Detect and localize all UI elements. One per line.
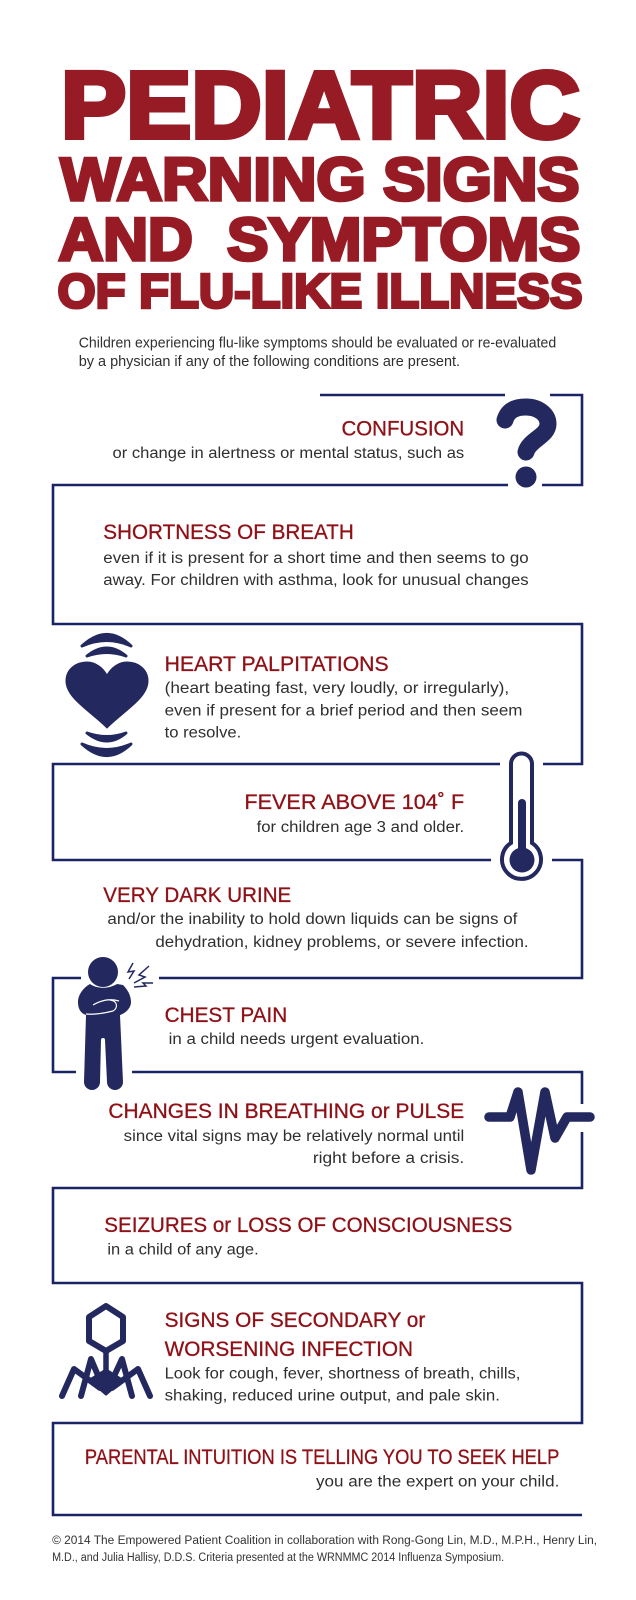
panel: changes in breathing or pulse: CHANGES IN BREATHING or PULSE	[108, 1099, 464, 1123]
panel: confusion	[112, 416, 464, 462]
panel: chest pain: CHEST PAIN	[165, 1003, 287, 1027]
panel: heart palpitations: even if present for a brief period and then seem	[165, 702, 522, 720]
panel: fever: for children age 3 and older.	[257, 819, 464, 836]
panel: seizures: SEIZURES or LOSS OF CONSCIOUSNESS	[104, 1213, 512, 1237]
panel: shortness of breath	[103, 520, 529, 589]
panel: confusion: or change in alertness or mental status, such as	[112, 445, 464, 462]
panel: parental intuition: you are the expert on your child.	[316, 1474, 559, 1490]
panel: changes in breathing or pulse	[108, 1099, 464, 1167]
icon: heart	[66, 634, 148, 756]
icon: person with chest pain	[76, 957, 159, 1090]
panel: secondary infection: WORSENING INFECTION	[165, 1337, 413, 1361]
title: PEDIATRIC	[61, 52, 580, 158]
intro text	[79, 336, 556, 370]
panel: secondary infection: SIGNS OF SECONDARY or	[165, 1308, 425, 1332]
panel: chest pain: in a child needs urgent evaluation.	[169, 1031, 424, 1048]
panel: shortness of breath: away. For children with asthma, look for unusual changes	[103, 572, 529, 589]
panel: parental intuition	[85, 1445, 559, 1490]
panel: fever: FEVER ABOVE 104˚ F	[244, 790, 464, 814]
panel: heart palpitations: HEART PALPITATIONS	[165, 652, 389, 676]
icon: pulse line	[489, 1092, 590, 1170]
panel: very dark urine: dehydration, kidney problems, or severe infection.	[155, 934, 529, 951]
panel: very dark urine	[103, 883, 529, 951]
intro text: by a physician if any of the following conditions are present.	[79, 354, 460, 370]
title: OF FLU-LIKE ILLNESS	[58, 266, 582, 318]
panel: parental intuition: PARENTAL INTUITION IS TELLING YOU TO SEEK HELP	[85, 1445, 559, 1469]
footer credit: © 2014 The Empowered Patient Coalition in collaboration with Rong-Gong Lin, M.D., M.P.H., Henry Lin,	[52, 1535, 597, 1547]
panel: very dark urine: VERY DARK URINE	[103, 883, 291, 907]
panel: fever	[244, 790, 464, 836]
intro text: Children experiencing flu-like symptoms should be evaluated or re-evaluated	[79, 336, 556, 352]
icon: question mark	[505, 390, 550, 490]
panel: heart palpitations: (heart beating fast, very loudly, or irregularly),	[165, 680, 509, 697]
panel: very dark urine: and/or the inability to hold down liquids can be signs of	[107, 911, 518, 928]
panel: changes in breathing or pulse: right before a crisis.	[313, 1150, 464, 1167]
panel: heart palpitations: to resolve.	[165, 724, 241, 742]
panel: heart palpitations	[165, 652, 522, 742]
title: WARNING SIGNS	[60, 146, 580, 213]
panel: changes in breathing or pulse: since vital signs may be relatively normal until	[124, 1128, 464, 1145]
footer credit: M.D., and Julia Hallisy, D.D.S. Criteria presented at the WRNMMC 2014 Influenza Symposium.	[52, 1552, 504, 1564]
zigzag frame	[53, 395, 582, 1515]
footer credit	[52, 1535, 597, 1564]
panel: shortness of breath: even if it is present for a short time and then seems to go	[103, 550, 529, 567]
title: AND SYMPTOMS	[58, 206, 580, 273]
panel: secondary infection: Look for cough, fever, shortness of breath, chills,	[165, 1366, 520, 1382]
icon: virus	[62, 1306, 150, 1396]
panel: secondary infection: shaking, reduced urine output, and pale skin.	[165, 1388, 500, 1404]
panel: confusion: CONFUSION	[342, 416, 464, 440]
panel: chest pain	[165, 1003, 424, 1048]
panel: seizures: in a child of any age.	[107, 1242, 259, 1258]
icon: thermometer	[491, 754, 552, 879]
panel: secondary infection	[165, 1308, 520, 1404]
panel: shortness of breath: SHORTNESS OF BREATH	[103, 520, 354, 544]
panel: seizures	[104, 1213, 512, 1258]
title	[58, 52, 582, 318]
